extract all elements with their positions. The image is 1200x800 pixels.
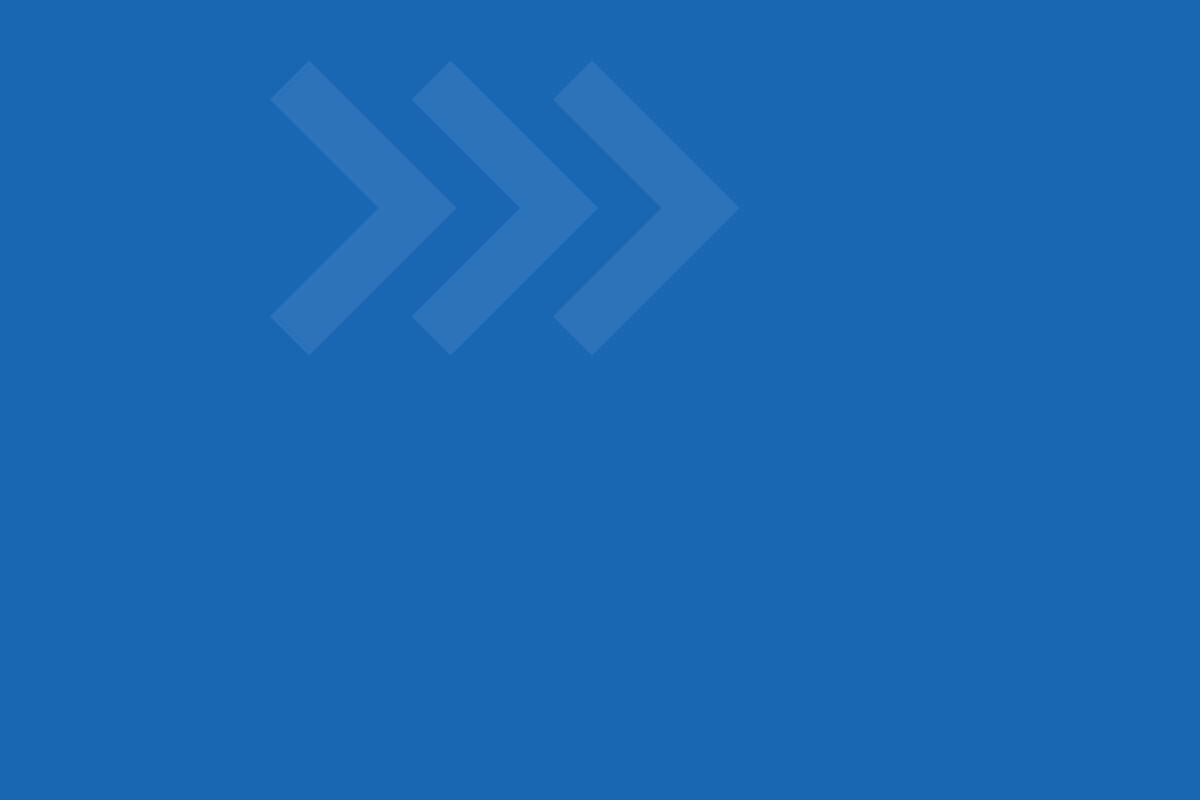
icon: chevron 1: [270, 60, 456, 356]
icon: chevron 2: [412, 60, 598, 356]
icon: chevron 3: [553, 60, 740, 356]
icon: triple chevron arrow: [270, 60, 740, 356]
